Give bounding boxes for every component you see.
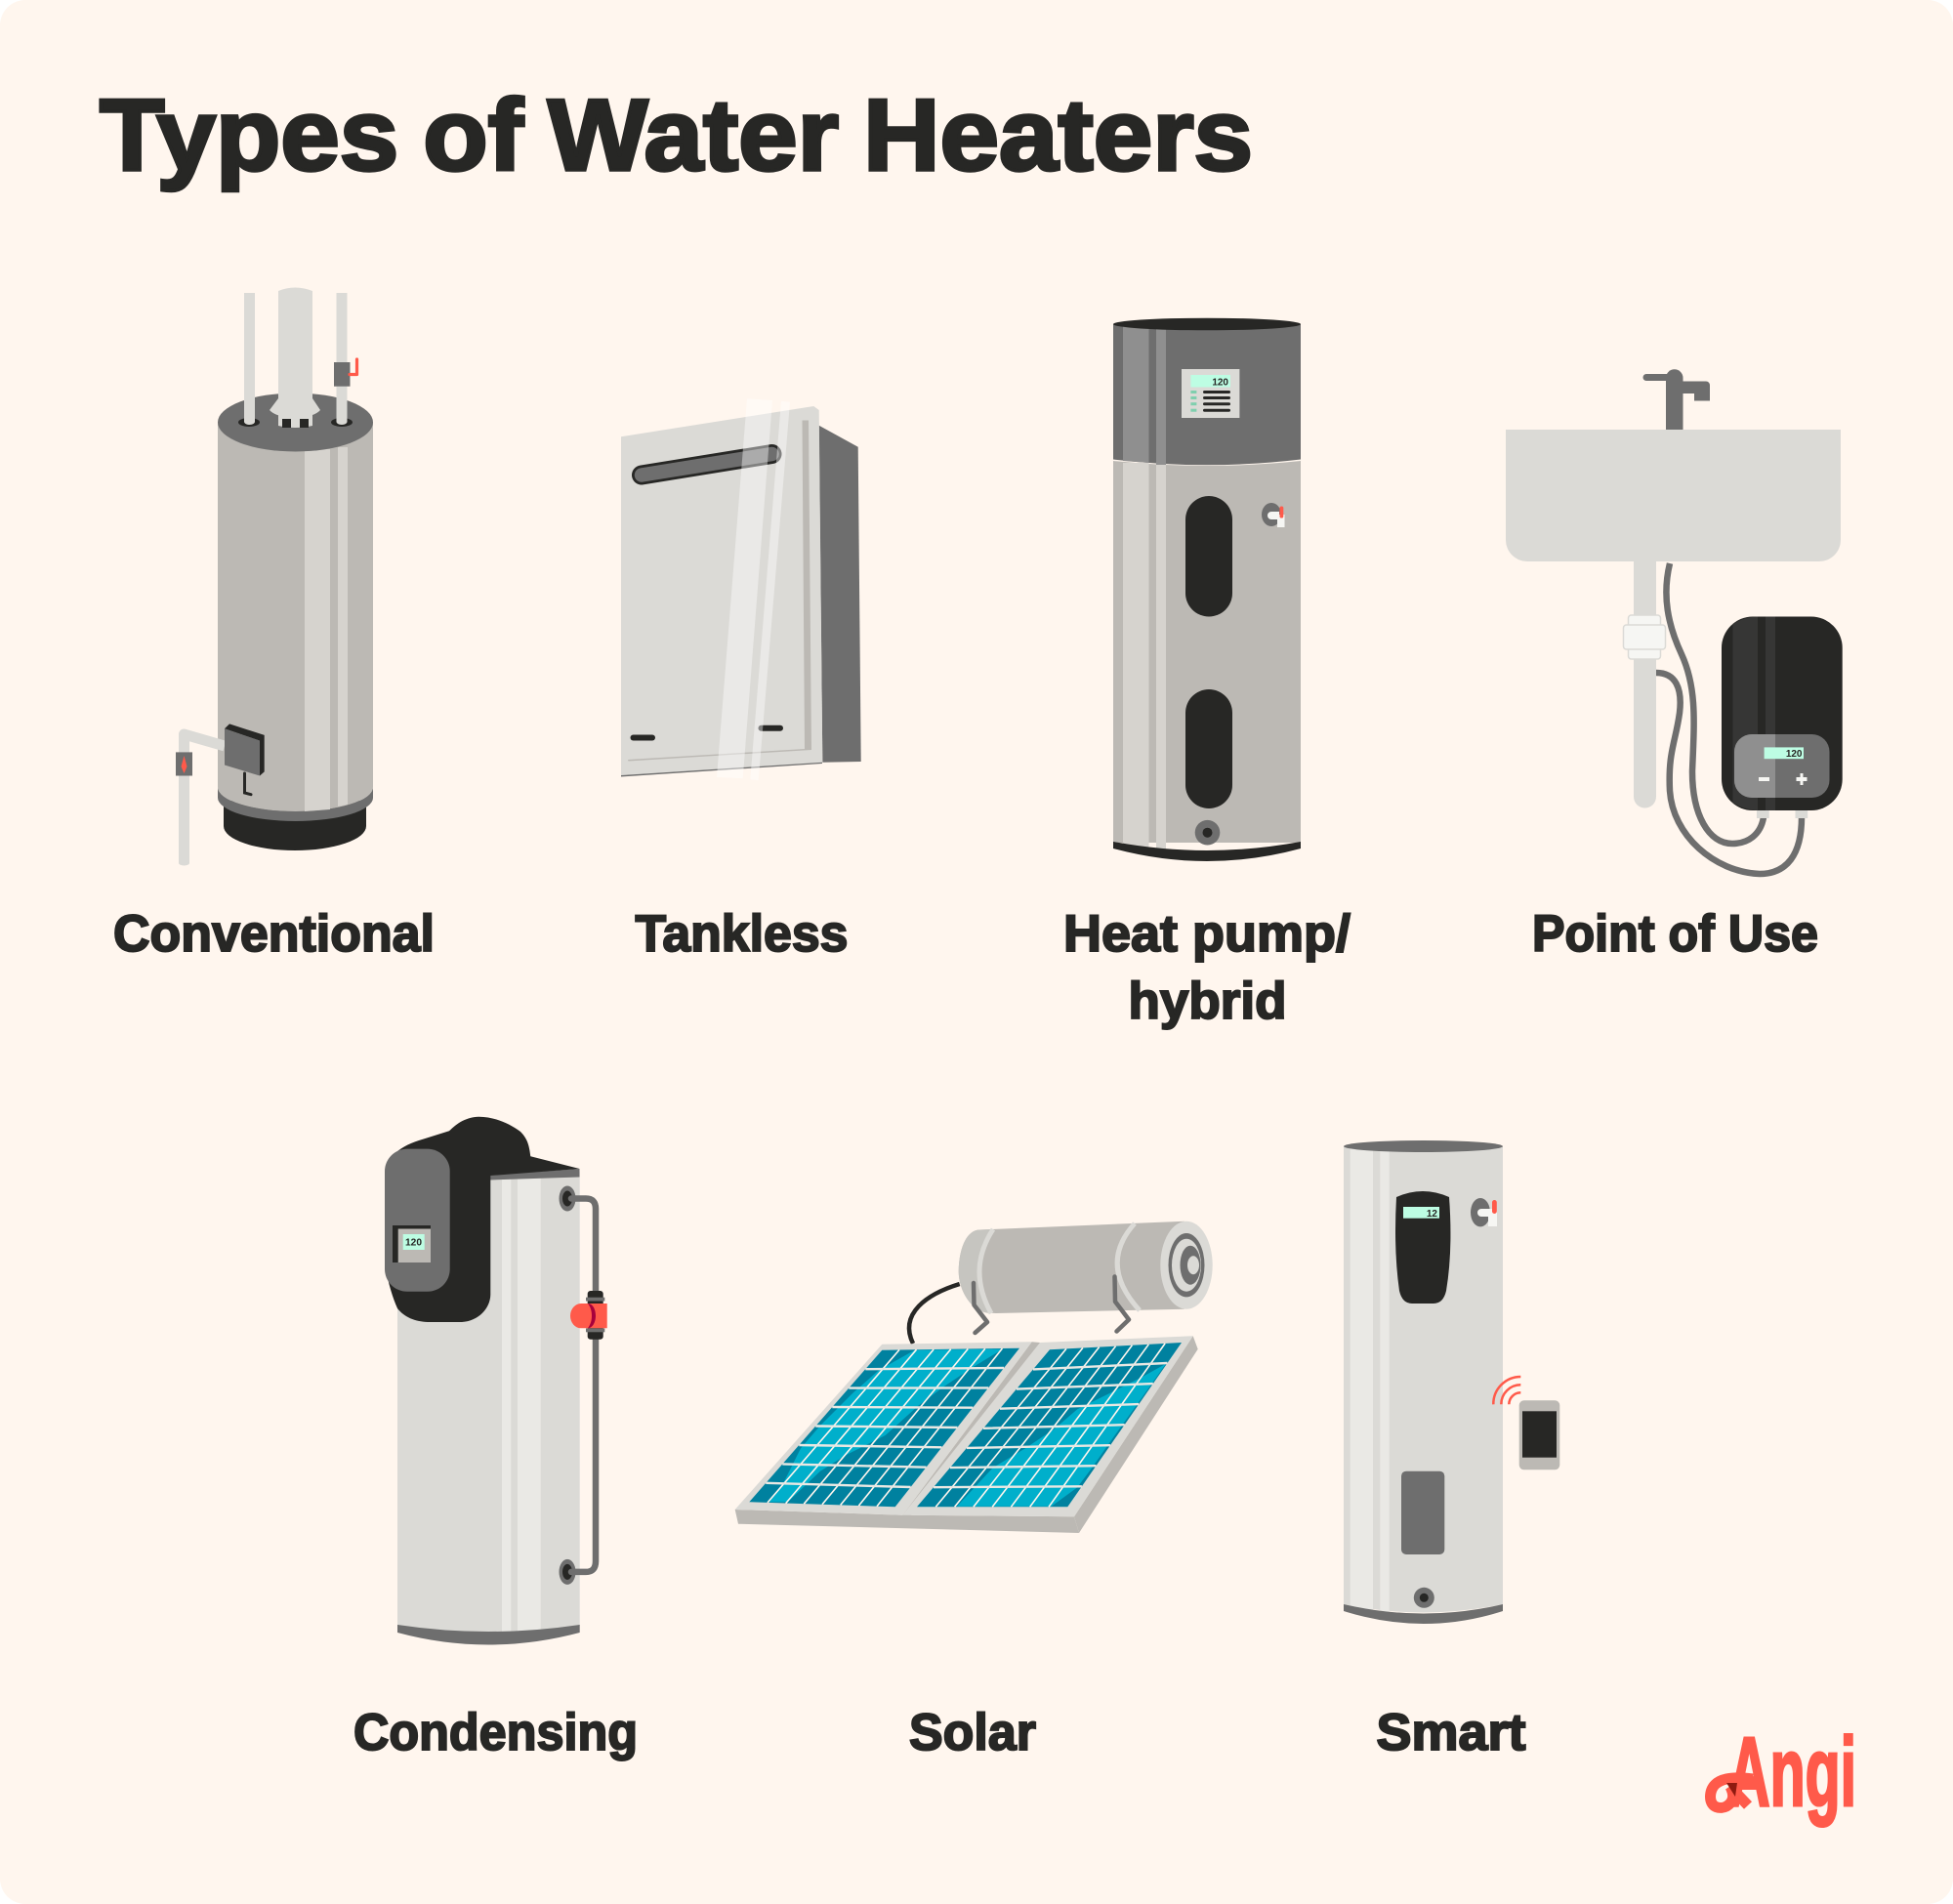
control display: 120: [1212, 377, 1228, 389]
logo: Angi: [1711, 1718, 1856, 1827]
hoses: [1656, 563, 1802, 874]
control panel: [385, 1149, 450, 1292]
drain valve: [1471, 1198, 1497, 1226]
label: heat pump hybrid: [1063, 905, 1350, 1030]
drain valve: [1262, 503, 1285, 527]
illustration: heat pump hybrid water heater: [1113, 318, 1301, 861]
illustration: point of use water heater with sink: [1506, 369, 1843, 874]
label: heat pump hybrid: hybrid: [1129, 973, 1287, 1030]
smartphone: [1519, 1400, 1559, 1469]
thermostat remote: 12: [1427, 1209, 1437, 1220]
faucet: [1646, 369, 1710, 430]
solar panel frames: [735, 1336, 1198, 1533]
illustration: condensing water heater: [385, 1117, 607, 1644]
wall unit: 120: [1786, 749, 1803, 760]
pressure relief valve: [334, 359, 357, 387]
gas valve with flame: [176, 752, 192, 775]
control panel: 120: [405, 1238, 422, 1248]
black top cover: [386, 1117, 580, 1322]
solar cells: [749, 1343, 1182, 1507]
recirculation pipe and pump: [559, 1185, 607, 1585]
logo: Angi: Angi: [1728, 1718, 1856, 1827]
illustration: smart water heater: [1344, 1140, 1559, 1624]
thermostat remote: [1395, 1191, 1450, 1304]
control display: [1182, 369, 1239, 418]
illustration: tankless water heater: [621, 398, 861, 780]
label: smart: Smart: [1377, 1704, 1525, 1761]
storage cylinder: [959, 1221, 1213, 1313]
label: point of use: Point of Use: [1532, 905, 1818, 963]
label: solar: Solar: [909, 1704, 1036, 1761]
illustration: solar water heater: [735, 1221, 1213, 1533]
wifi signal: [1493, 1377, 1520, 1404]
label: tankless: Tankless: [635, 905, 848, 963]
label: conventional: Conventional: [113, 905, 435, 963]
wall unit: [1722, 617, 1843, 810]
label: heat pump hybrid: Heat pump/: [1063, 905, 1350, 963]
label: condensing: Condensing: [353, 1704, 638, 1761]
title: Types of Water Heaters: [100, 79, 1253, 192]
control box: [225, 724, 265, 795]
illustration: conventional water heater: [176, 287, 373, 865]
